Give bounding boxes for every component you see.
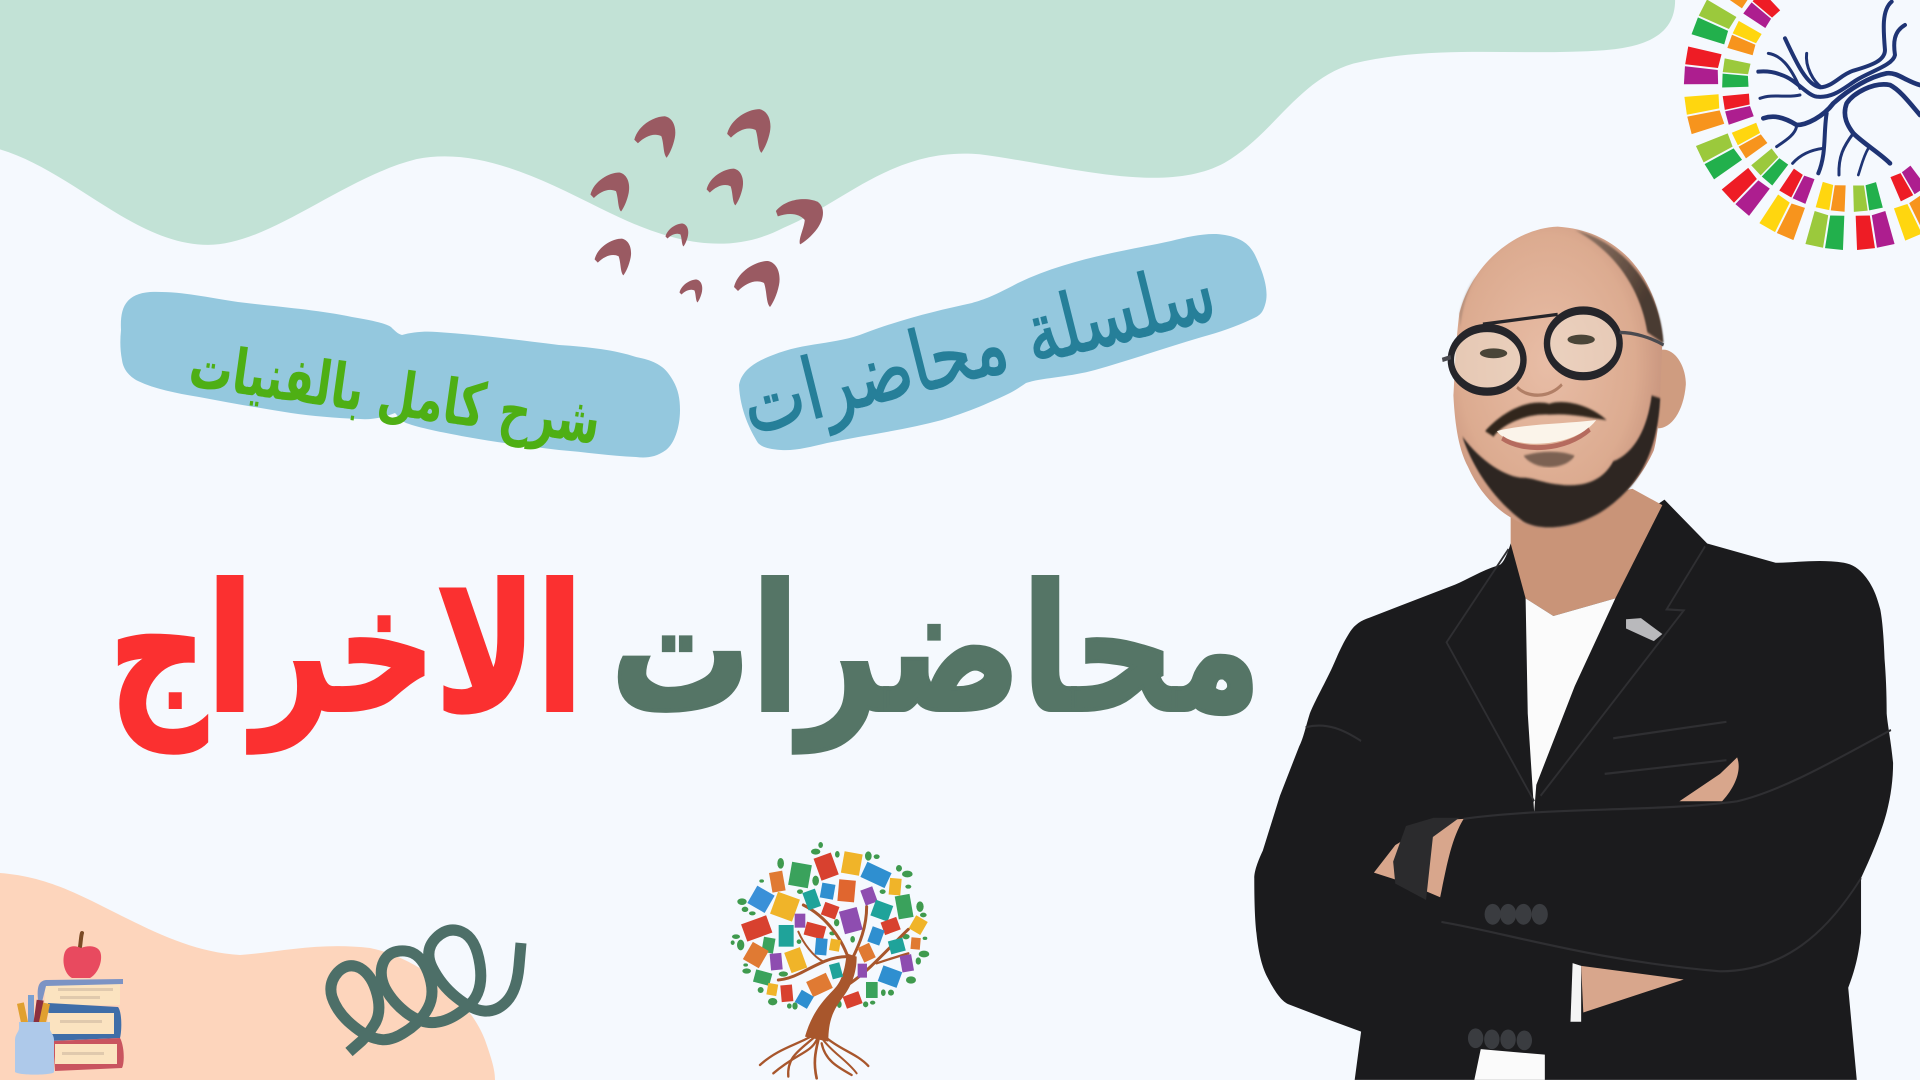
soul patch bbox=[1523, 452, 1575, 467]
left wrist and hand bbox=[1374, 819, 1464, 897]
lower hand bbox=[1581, 966, 1684, 1012]
jar bbox=[15, 1022, 54, 1075]
icon: maroon arrowhead cluster bbox=[590, 109, 828, 307]
neck bbox=[1511, 489, 1662, 616]
eyes bbox=[1480, 335, 1595, 358]
head bbox=[1453, 227, 1662, 530]
banner text: full technical explanation: شرح كامل بالفنيات bbox=[185, 329, 605, 459]
sleeve buttons bbox=[1468, 904, 1548, 1050]
moustache bbox=[1485, 402, 1607, 437]
book stack bbox=[38, 979, 124, 1071]
hair shadow bbox=[1459, 230, 1664, 343]
icon: navy tree branches bbox=[1758, 2, 1920, 175]
title word: directing: الاخراج bbox=[109, 549, 583, 753]
green wave background shape bbox=[0, 0, 1675, 245]
peach wave background shape bbox=[0, 873, 495, 1080]
lower lip bbox=[1502, 429, 1590, 448]
title word: lectures: محاضرات bbox=[610, 549, 1262, 753]
glasses bbox=[1442, 310, 1664, 392]
lower shirt bbox=[1474, 1049, 1545, 1080]
white shirt bbox=[1526, 598, 1615, 812]
icon: books, apple and pencil jar bbox=[15, 933, 124, 1075]
jacket bbox=[1254, 500, 1893, 1080]
title bbox=[109, 549, 1262, 753]
nose bbox=[1517, 385, 1562, 395]
tree leaves bbox=[731, 842, 929, 1010]
jacket lapel lines bbox=[1306, 546, 1891, 971]
icon: ring of colored books bbox=[1683, 0, 1920, 251]
pencils bbox=[17, 995, 50, 1024]
person portrait bbox=[1254, 227, 1893, 1080]
lapel pin bbox=[1626, 618, 1662, 641]
apple bbox=[63, 933, 101, 978]
icon: green spiral squiggle bbox=[331, 930, 521, 1052]
right hand bbox=[1679, 757, 1739, 801]
wristwatch bbox=[1393, 818, 1459, 900]
smile teeth bbox=[1497, 420, 1596, 444]
banner text: lecture series: سلسلة محاضرات bbox=[731, 242, 1225, 455]
banner: lecture series bbox=[731, 234, 1267, 455]
banner: full technical explanation bbox=[120, 292, 680, 459]
white shirt cuff bbox=[1570, 963, 1581, 1022]
icon: tree of books bbox=[731, 842, 929, 1078]
tree trunk and branches bbox=[760, 905, 908, 1078]
ear bbox=[1656, 350, 1686, 428]
beard bbox=[1462, 395, 1660, 527]
lenses bbox=[1451, 310, 1620, 392]
tree books bbox=[741, 851, 928, 1009]
